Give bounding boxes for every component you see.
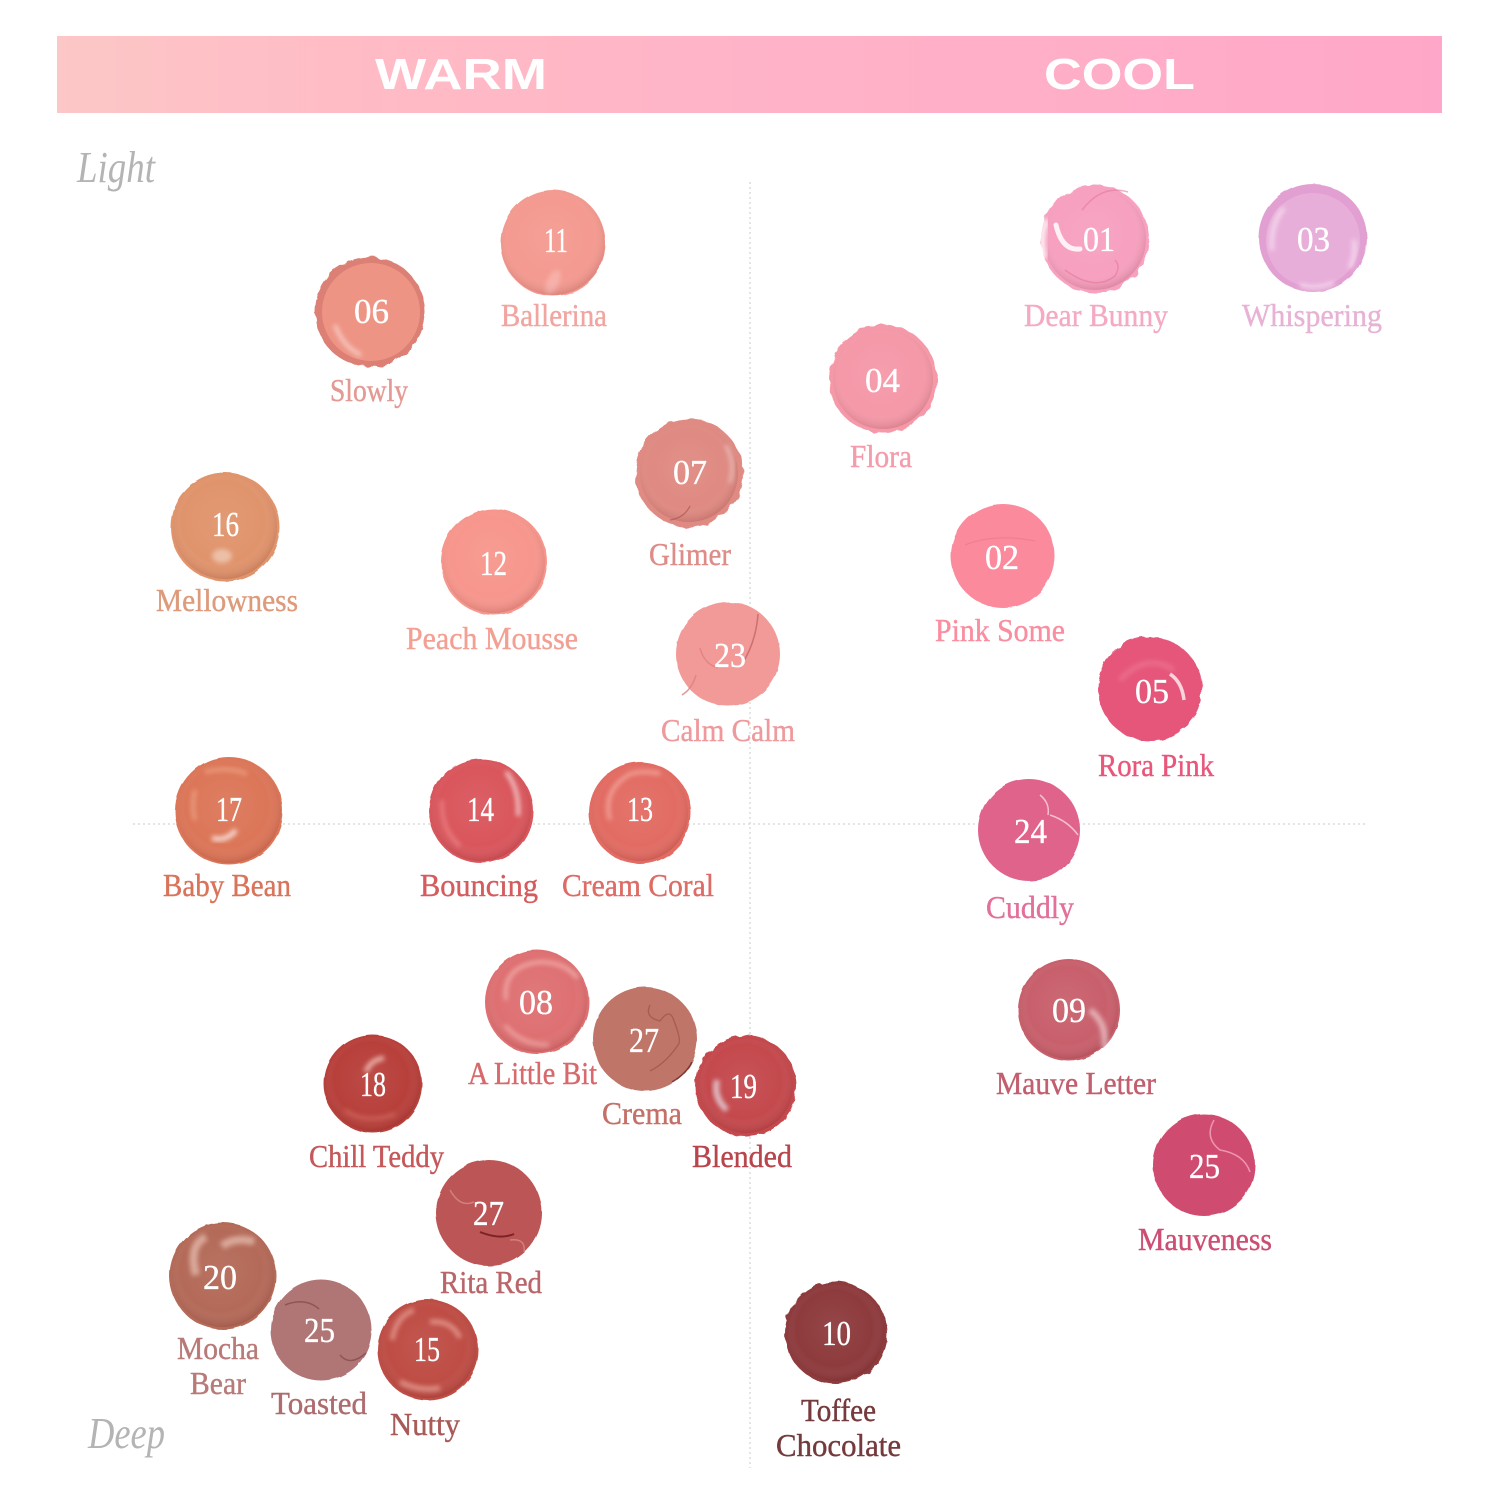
swatch 05 Rora Pink: Rora Pink: [1098, 747, 1214, 783]
swatch 18 Chill Teddy: Chill Teddy: [309, 1138, 444, 1174]
swatch 20 Mocha Bear: [170, 1222, 276, 1401]
swatch 25 Mauveness: Mauveness: [1138, 1221, 1272, 1257]
swatch 25 Toasted: [270, 1280, 372, 1421]
swatch 27 Crema: 27: [629, 1021, 659, 1060]
swatch 20 Mocha Bear: Mocha: [177, 1330, 259, 1366]
swatch 08 A Little Bit: 08: [519, 983, 553, 1022]
swatch 24 Cuddly: [978, 779, 1080, 925]
swatch 16 Mellowness: [156, 472, 298, 618]
swatch 04 Flora: 04: [865, 361, 900, 400]
swatch 19 Blended: 19: [730, 1067, 757, 1106]
axis label: Light: Light: [76, 143, 156, 192]
swatch 13 Cream Coral: 13: [627, 790, 653, 829]
swatch 01 Dear Bunny: Dear Bunny: [1024, 297, 1168, 333]
swatch 07 Glimer: [635, 419, 743, 572]
swatch 23 Calm Calm: 23: [714, 636, 746, 675]
swatch 23 Calm Calm: [661, 602, 795, 748]
swatch 25 Toasted: Toasted: [271, 1385, 367, 1421]
swatch 11 Ballerina: 11: [544, 221, 568, 260]
swatch 03 Whispering: [1242, 184, 1382, 333]
swatch 02 Pink Some: [935, 504, 1065, 648]
swatch 20 Mocha Bear: 20: [203, 1258, 237, 1297]
header band: warm and cool: [57, 36, 1442, 113]
swatch 13 Cream Coral: [562, 762, 714, 903]
swatch 11 Ballerina: Ballerina: [501, 297, 607, 333]
header band: warm and cool: COOL: [1044, 50, 1195, 99]
axis label: Deep: Deep: [87, 1409, 165, 1458]
swatch 12 Peach Mousse: 12: [480, 544, 507, 583]
swatch 27 Crema: Crema: [602, 1095, 682, 1131]
swatch 12 Peach Mousse: [406, 509, 578, 656]
swatch 14 Bouncing: 14: [467, 790, 494, 829]
swatch 03 Whispering: Whispering: [1242, 297, 1382, 333]
swatch 15 Nutty: [378, 1300, 478, 1442]
swatch 01 Dear Bunny: [1024, 185, 1168, 333]
swatch 23 Calm Calm: Calm Calm: [661, 712, 795, 748]
swatch 15 Nutty: Nutty: [390, 1406, 460, 1442]
swatch 14 Bouncing: Bouncing: [420, 867, 538, 903]
swatch 10 Toffee Chocolate: 10: [822, 1314, 851, 1353]
swatch 06 Slowly: [315, 257, 425, 408]
swatch 27 Rita Red: 27: [473, 1194, 504, 1233]
swatch 25 Mauveness: [1138, 1114, 1272, 1257]
swatch 24 Cuddly: Cuddly: [986, 889, 1074, 925]
header band: warm and cool: WARM: [375, 50, 547, 99]
swatch 09 Mauve Letter: Mauve Letter: [996, 1065, 1156, 1101]
swatch 19 Blended: [692, 1036, 796, 1174]
swatch 17 Baby Bean: Baby Bean: [163, 867, 291, 903]
swatch 19 Blended: Blended: [692, 1138, 792, 1174]
swatch 08 A Little Bit: [468, 950, 597, 1091]
swatch 07 Glimer: 07: [673, 453, 707, 492]
swatch 17 Baby Bean: [163, 757, 291, 903]
swatch 17 Baby Bean: 17: [216, 790, 242, 829]
swatch 05 Rora Pink: 05: [1135, 672, 1169, 711]
swatch 15 Nutty: 15: [414, 1330, 440, 1369]
swatch 11 Ballerina: [500, 190, 607, 333]
swatch 18 Chill Teddy: [309, 1035, 444, 1174]
swatch 05 Rora Pink: [1098, 637, 1214, 783]
swatch 04 Flora: [829, 325, 937, 474]
swatch 27 Rita Red: [436, 1160, 542, 1300]
swatch 02 Pink Some: Pink Some: [935, 612, 1065, 648]
swatch 10 Toffee Chocolate: Chocolate: [776, 1427, 901, 1463]
swatch 16 Mellowness: 16: [212, 505, 239, 544]
swatch 01 Dear Bunny: 01: [1083, 220, 1115, 259]
swatch 14 Bouncing: [420, 759, 538, 903]
swatch 12 Peach Mousse: Peach Mousse: [406, 620, 578, 656]
swatch 25 Toasted: 25: [304, 1311, 335, 1350]
swatch 20 Mocha Bear: Bear: [190, 1365, 246, 1401]
swatch 16 Mellowness: Mellowness: [156, 582, 298, 618]
swatch 09 Mauve Letter: 09: [1052, 991, 1086, 1030]
swatch 09 Mauve Letter: [996, 959, 1156, 1101]
swatch 10 Toffee Chocolate: [776, 1282, 901, 1463]
swatch 25 Mauveness: 25: [1189, 1147, 1220, 1186]
swatch 02 Pink Some: 02: [985, 538, 1019, 577]
swatch 04 Flora: Flora: [850, 438, 912, 474]
swatch 10 Toffee Chocolate: Toffee: [801, 1392, 876, 1428]
axis divider lines: [133, 182, 1365, 1468]
swatch 27 Rita Red: Rita Red: [440, 1264, 542, 1300]
swatch 18 Chill Teddy: 18: [360, 1065, 386, 1104]
swatch 07 Glimer: Glimer: [649, 536, 731, 572]
swatch 08 A Little Bit: A Little Bit: [468, 1055, 597, 1091]
swatch 24 Cuddly: 24: [1014, 812, 1047, 851]
swatch 03 Whispering: 03: [1297, 220, 1330, 259]
swatch 06 Slowly: 06: [354, 292, 389, 331]
swatch 13 Cream Coral: Cream Coral: [562, 867, 714, 903]
swatch 27 Crema: [593, 987, 697, 1131]
swatch 06 Slowly: Slowly: [330, 372, 408, 408]
